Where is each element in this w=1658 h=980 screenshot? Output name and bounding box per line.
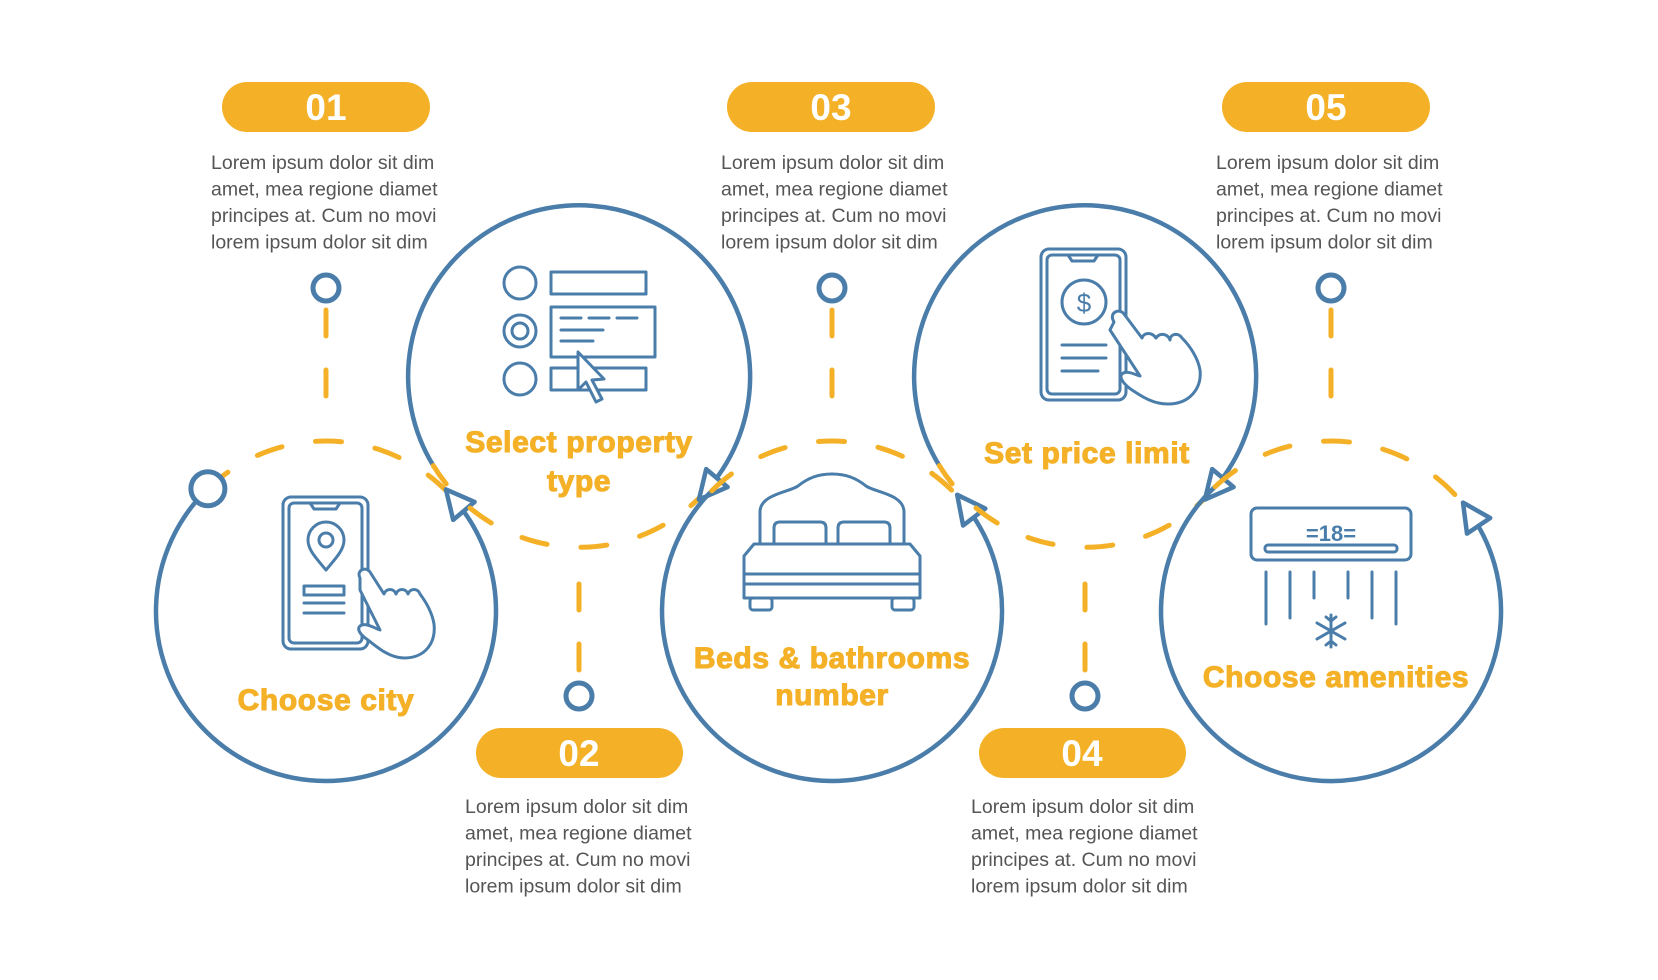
text 05: lorem ipsum dolor sit dim [1216,232,1433,254]
step 04 badge: 04 [1061,733,1103,774]
icon: bed [744,474,920,610]
text 05: Lorem ipsum dolor sit dim [1216,152,1439,174]
text 05: amet, mea regione diamet [1216,178,1443,200]
text 01: lorem ipsum dolor sit dim [211,232,428,254]
text 02: lorem ipsum dolor sit dim [465,876,682,898]
text 01: Lorem ipsum dolor sit dim [211,152,434,174]
text 04: Lorem ipsum dolor sit dim [971,796,1194,818]
label: Choose city: Choose city [238,684,414,717]
text 05: principes at. Cum no movi [1216,205,1441,227]
text 02: Lorem ipsum dolor sit dim [465,796,688,818]
text 01: principes at. Cum no movi [211,205,436,227]
text 02: principes at. Cum no movi [465,849,690,871]
label: Beds & bathrooms number: number [775,679,889,712]
icon: air conditioner [1251,508,1411,647]
text 03: principes at. Cum no movi [721,205,946,227]
circle 1 path [156,441,496,781]
step 05 badge [1222,82,1430,132]
icon: phone with location pin [283,497,434,658]
connector rings [313,275,1344,709]
circle 2 path [408,205,750,547]
connector lines: vertical dashes [326,310,1331,676]
icon: phone with dollar: $ [1077,288,1092,318]
text 03: Lorem ipsum dolor sit dim [721,152,944,174]
text 04: amet, mea regione diamet [971,822,1198,844]
icon: air conditioner: =18= [1306,521,1356,546]
text 03: lorem ipsum dolor sit dim [721,232,938,254]
icon: phone with dollar [1041,249,1200,404]
label: Select property type: type [547,465,611,498]
step 02 badge [476,728,683,778]
step 02 badge: 02 [558,733,600,774]
icon: property type list [504,267,655,402]
circle 5 path [1161,441,1501,781]
text 04: principes at. Cum no movi [971,849,1196,871]
text 03: amet, mea regione diamet [721,178,948,200]
circle 3 path [662,441,1002,781]
step 04 badge [979,728,1186,778]
text 04: lorem ipsum dolor sit dim [971,876,1188,898]
text 02: amet, mea regione diamet [465,822,692,844]
label: Set price limit: Set price limit [984,437,1190,470]
label: Choose amenities: Choose amenities [1203,661,1469,694]
circle 4 path [914,205,1256,547]
label: Beds & bathrooms number: Beds & bathrooms [694,642,970,675]
step 05 badge: 05 [1305,87,1347,128]
step 01 badge [222,82,430,132]
step 03 badge [727,82,935,132]
label: Select property type: Select property [465,426,693,459]
step 03 badge: 03 [810,87,852,128]
text 01: amet, mea regione diamet [211,178,438,200]
step 01 badge: 01 [305,87,347,128]
